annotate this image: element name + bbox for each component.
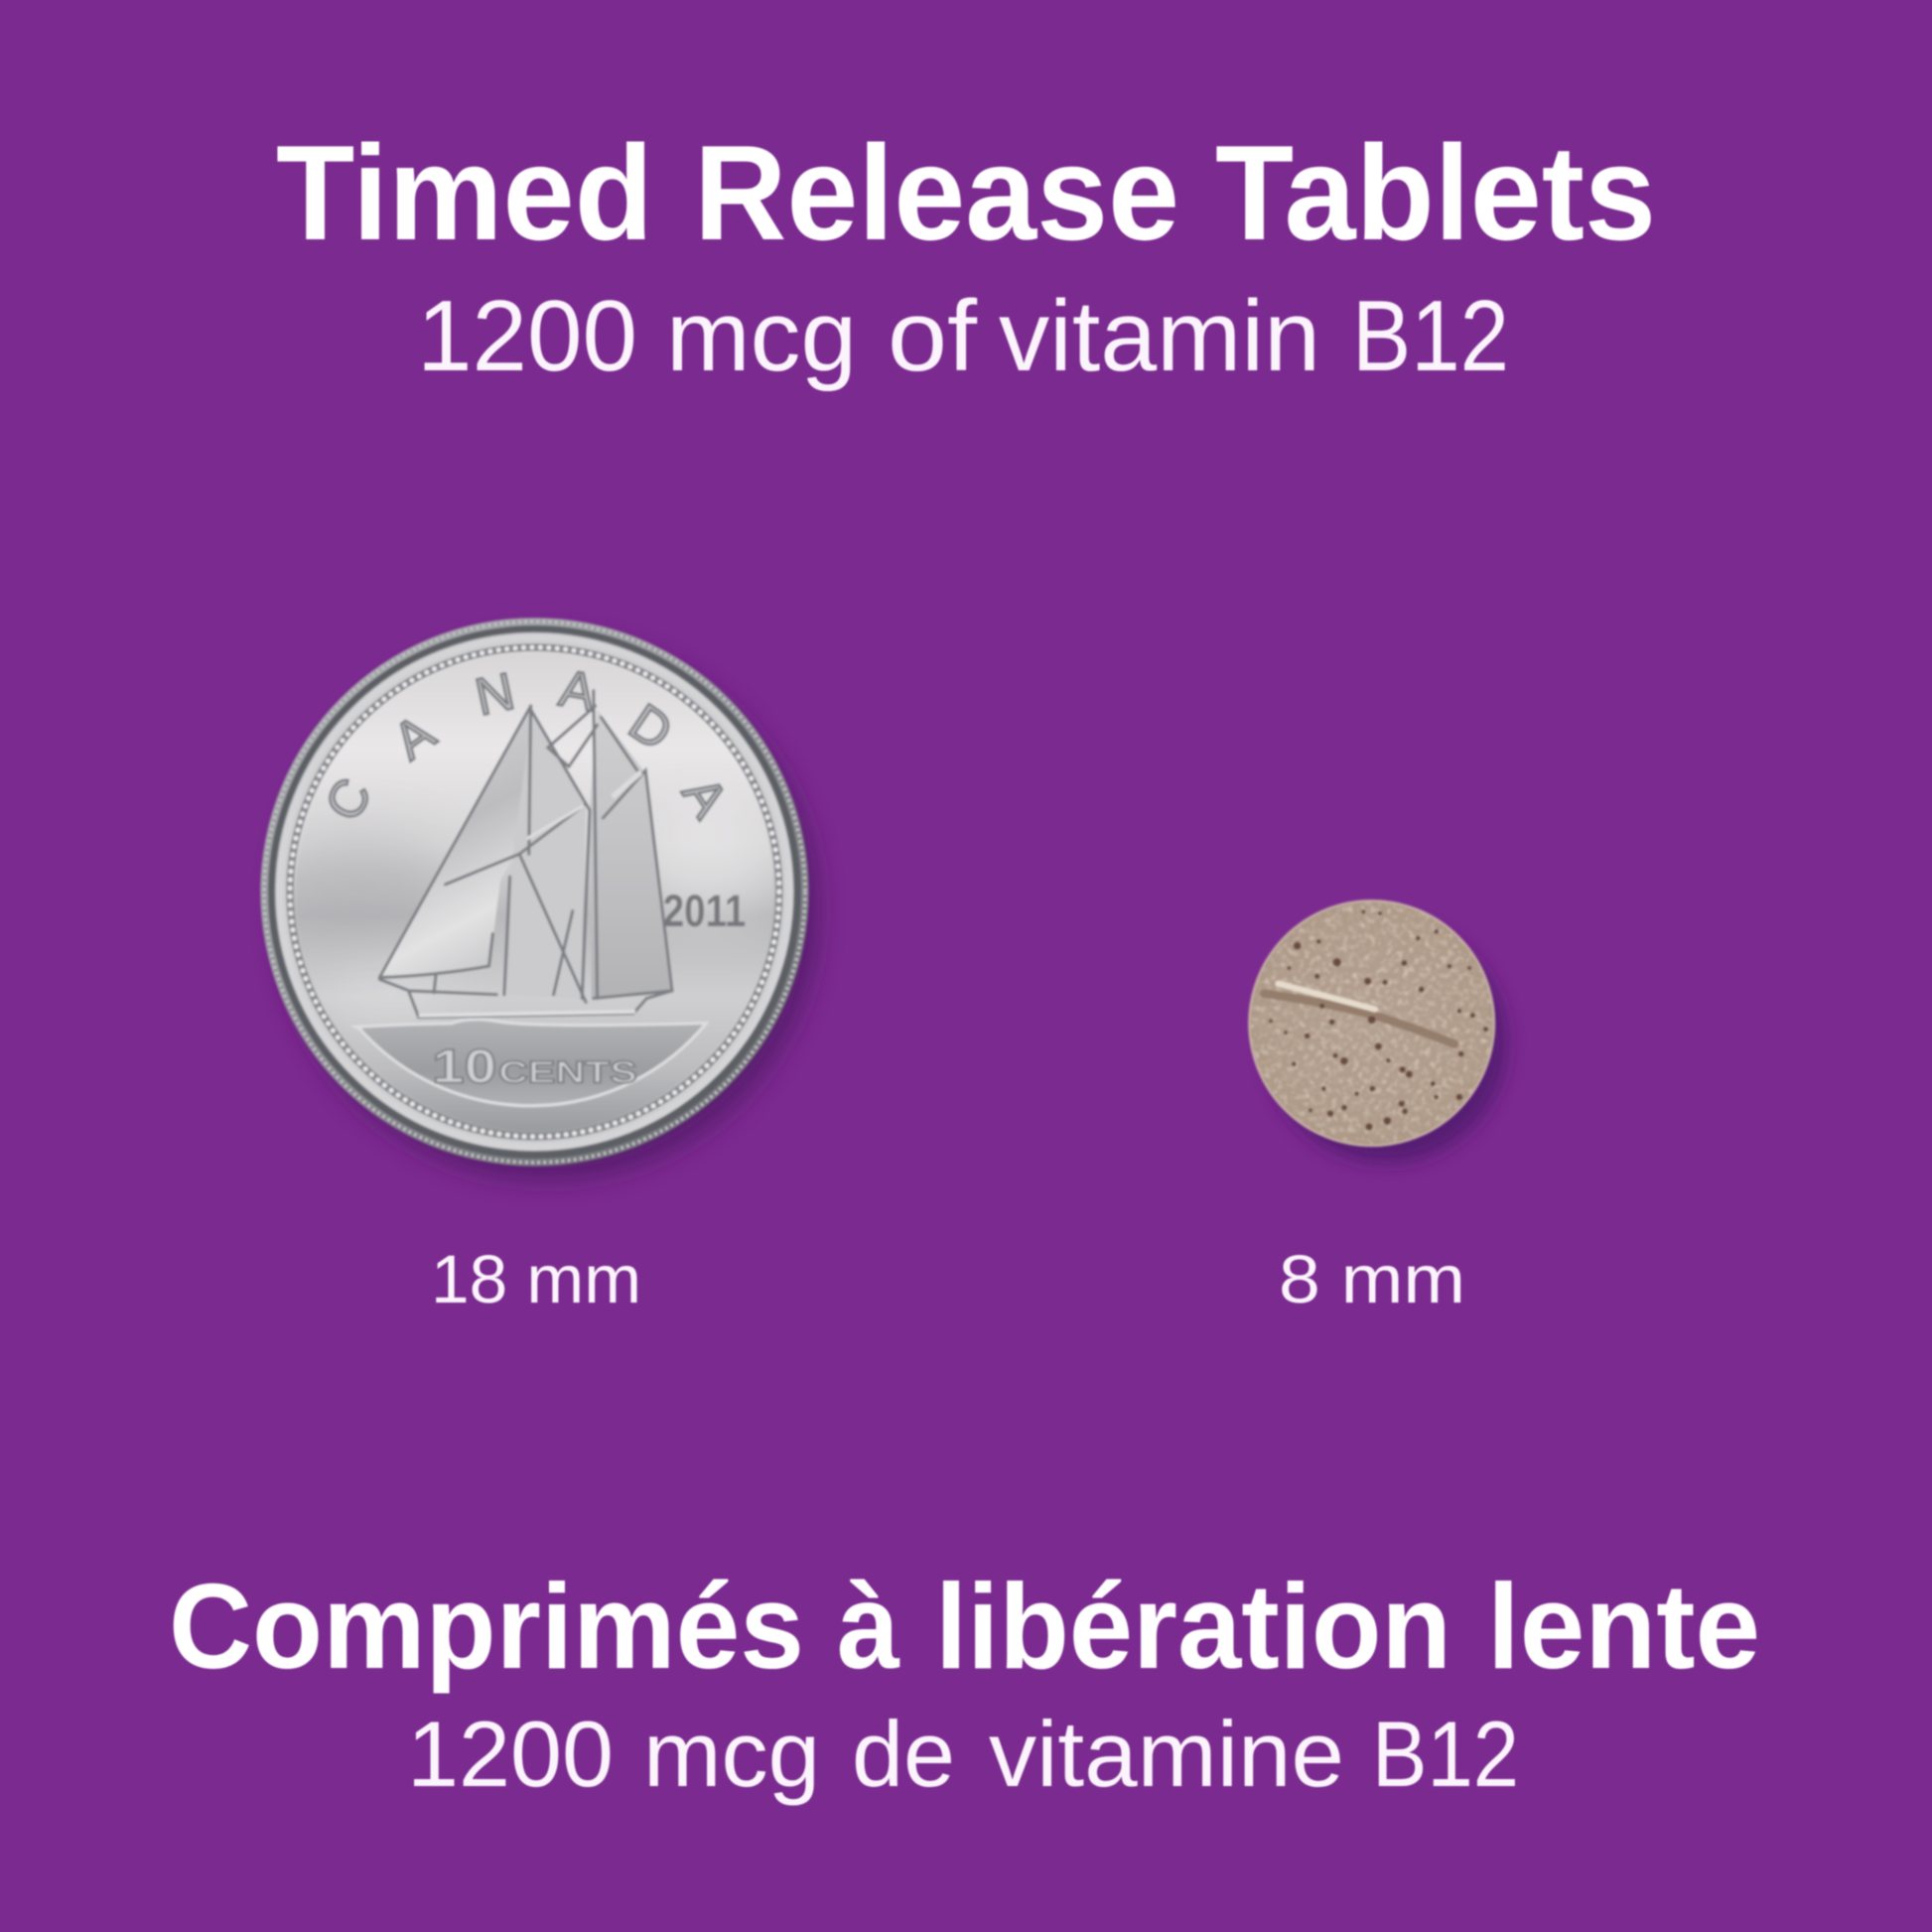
- coin lettering: CANADA: C: [314, 768, 383, 831]
- French subtitle: mcg: [643, 1702, 820, 1806]
- subtitle: 1200 mcg of vitamin B12: mcg: [666, 281, 857, 392]
- coin lettering: CANADA: A: [671, 766, 740, 828]
- tablet shadow: [1266, 921, 1507, 1164]
- French subtitle: 1200: [407, 1702, 614, 1806]
- subtitle: 1200 mcg of vitamin B12: 1200: [417, 281, 637, 392]
- coin lettering: CANADA: A: [383, 703, 446, 771]
- title: Timed Release Tablets: Timed: [276, 117, 653, 268]
- coin size label: 18 mm: [431, 1241, 641, 1317]
- coin lettering: 10 CENTS: [432, 1041, 637, 1094]
- French title: [169, 1559, 1760, 1694]
- coin face: [260, 618, 809, 1167]
- coin shadow: [276, 637, 819, 1180]
- sails: [380, 710, 531, 978]
- French subtitle: [407, 1702, 1519, 1806]
- title: Timed Release Tablets: Release: [694, 117, 1179, 268]
- coin: Canadian 10 cent dime: [260, 618, 819, 1180]
- rigging lines: [379, 691, 672, 1018]
- French title: Comprimés: [169, 1559, 804, 1694]
- coin lettering: CANADA: N: [471, 662, 519, 727]
- subtitle: 1200 mcg of vitamin B12: vitamin: [999, 281, 1320, 392]
- speckles: [1269, 909, 1488, 1131]
- title: Timed Release Tablets: [276, 117, 1656, 268]
- tablet: speckled 8 mm pill: [1249, 900, 1507, 1164]
- French title: libération: [935, 1559, 1451, 1694]
- water segment: [356, 1020, 706, 1106]
- score line: [1264, 994, 1454, 1044]
- French subtitle: B12: [1372, 1702, 1519, 1806]
- subtitle: 1200 mcg of vitamin B12: [417, 281, 1509, 392]
- tablet size label: 8 mm: [1279, 1241, 1465, 1317]
- coin lettering: CANADA: D: [619, 693, 683, 762]
- coin lettering: 10 CENTS: CENTS: [498, 1055, 637, 1090]
- field shading: [272, 804, 770, 1029]
- coin lettering: CANADA: [314, 659, 740, 831]
- French title: à: [837, 1559, 900, 1694]
- French subtitle: de: [852, 1702, 955, 1806]
- French title: lente: [1487, 1559, 1760, 1694]
- French subtitle: vitamine: [989, 1702, 1344, 1806]
- subtitle: 1200 mcg of vitamin B12: B12: [1352, 281, 1509, 392]
- tablet body: [1249, 900, 1494, 1146]
- subtitle: 1200 mcg of vitamin B12: of: [888, 281, 978, 392]
- title: Timed Release Tablets: Tablets: [1215, 117, 1656, 268]
- coin lettering: CANADA: A: [555, 659, 601, 723]
- coin lettering: 2011: 2011: [663, 886, 746, 936]
- coin lettering: 10 CENTS: 10: [432, 1041, 496, 1094]
